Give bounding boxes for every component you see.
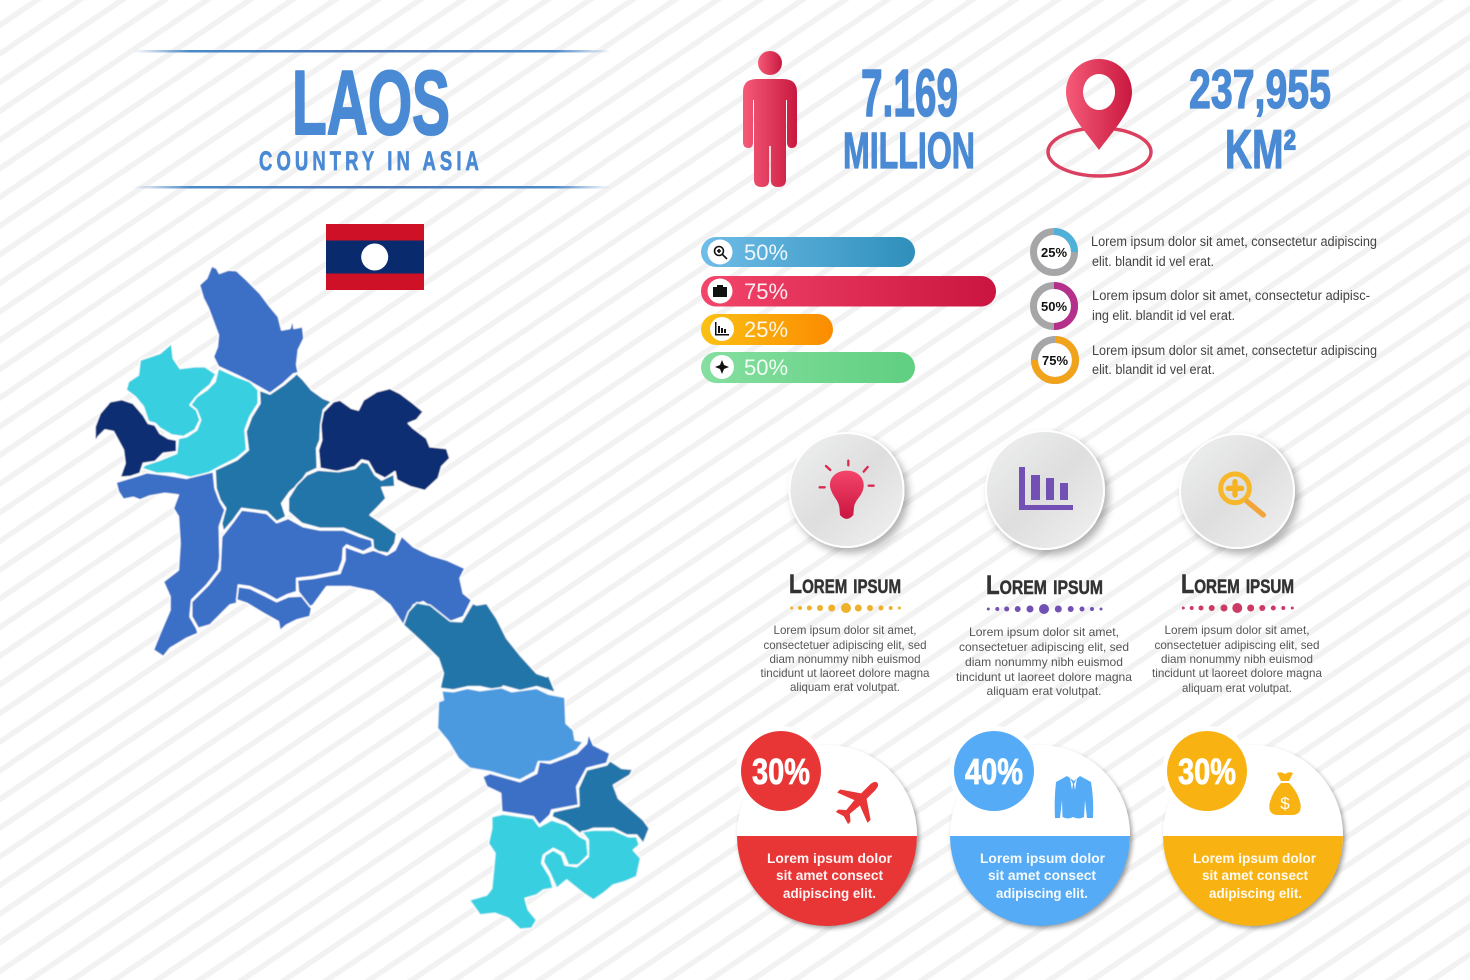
icon: airplane [827,768,892,833]
title block [133,50,611,188]
donut list [1034,232,1377,380]
area unit: KM² [1225,118,1296,180]
bar 50% blue: 50% [744,240,788,265]
population unit: MILLION [843,122,975,179]
body text: Lorem ipsum dolor sit amet, [1164,623,1310,637]
icon: light bulb button [790,433,904,547]
icon: bar chart button [986,431,1104,549]
body text: diam nonummy nibh euismod [1161,652,1313,666]
body text [956,625,1132,698]
feature column 2 [956,431,1132,698]
icon: magnifier button [1180,434,1294,548]
body text [760,623,930,694]
southern provinces [403,603,649,929]
caption: Lorem ipsum dolor [980,850,1106,866]
caption [1193,850,1317,901]
body text: diam nonummy nibh euismod [770,652,920,666]
dots [790,603,901,613]
body text: aliquam erat volutpat. [1182,681,1292,695]
bar chart [701,237,996,383]
caption: adipiscing elit. [783,885,876,901]
percentage: 30% [1178,751,1236,792]
stat circle red [736,726,917,926]
body text [1152,623,1322,695]
bar 25% orange [701,314,833,345]
text 25%: elit. blandit id vel erat. [1092,254,1214,269]
icon: money bag: $ [1280,794,1290,813]
northern provinces [95,266,472,657]
caption: sit amet consect [1202,867,1308,883]
body text: consectetuer adipiscing elit, sed [1154,638,1320,652]
donut 25% [1034,232,1074,272]
bar 50% green: 50% [744,355,788,380]
subtitle: COUNTRY IN ASIA [259,146,483,176]
text 50%: Lorem ipsum dolor sit amet, consectetur adipisc- [1092,288,1370,303]
heading: Lorem ipsum [986,570,1103,600]
text 75% [1092,343,1377,377]
stat circle blue [949,726,1130,926]
body text: tincidunt ut laoreet dolore magna [760,666,930,680]
title: LAOS [292,53,450,154]
percentage: 30% [752,751,810,792]
bar 50% blue [701,237,915,267]
bar 75% red [701,276,996,306]
flag of Laos [326,224,424,290]
dots [1182,603,1294,613]
body text: aliquam erat volutpat. [986,684,1102,698]
heading: Lorem ipsum [1181,569,1294,599]
area stat [1048,58,1331,180]
body text: diam nonummy nibh euismod [965,655,1123,669]
donut 50%: 50% [1041,299,1067,314]
percentage: 40% [965,751,1023,792]
caption: sit amet consect [988,867,1096,883]
bar 25% orange: 25% [744,317,788,342]
donut 50% [1034,286,1074,326]
text 50% [1092,288,1370,323]
body text: Lorem ipsum dolor sit amet, [774,623,916,637]
body text: consectetuer adipiscing elit, sed [764,638,926,652]
caption: sit amet consect [776,867,883,883]
dots [987,604,1102,614]
icon: money bag [1269,772,1301,815]
body text: Lorem ipsum dolor sit amet, [969,625,1119,639]
caption: adipiscing elit. [996,885,1088,901]
feature column 1 [760,433,930,694]
caption: adipiscing elit. [1209,885,1302,901]
heading: Lorem ipsum [789,569,901,599]
bar 75% red: 75% [744,279,788,304]
bar 50% green [701,352,915,383]
area number: 237,955 [1189,58,1331,120]
text 25% [1091,234,1377,269]
map of Laos [95,266,649,929]
text 50%: ing elit. blandit id vel erat. [1092,308,1235,323]
donut 75% [1034,340,1076,380]
feature column 3 [1152,434,1322,695]
stat circle yellow [1162,726,1343,926]
body text: aliquam erat volutpat. [790,680,900,694]
caption [980,850,1106,901]
body text: tincidunt ut laoreet dolore magna [1152,666,1322,680]
donut 25%: 25% [1041,245,1067,260]
caption [767,850,893,901]
caption: Lorem ipsum dolor [1193,850,1317,866]
icon: suit jacket [1055,776,1093,818]
text 75%: elit. blandit id vel erat. [1092,362,1215,377]
text 75%: Lorem ipsum dolor sit amet, consectetur adipiscing [1092,343,1377,358]
population number: 7.169 [861,56,958,131]
body text: consectetuer adipiscing elit, sed [959,640,1129,654]
icon: location pin [1048,59,1151,176]
donut 75%: 75% [1042,353,1068,368]
body text: tincidunt ut laoreet dolore magna [956,670,1132,684]
text 25%: Lorem ipsum dolor sit amet, consectetur adipiscing [1091,234,1377,249]
population stat [743,51,975,187]
icon: person [743,51,797,187]
caption: Lorem ipsum dolor [767,850,893,866]
